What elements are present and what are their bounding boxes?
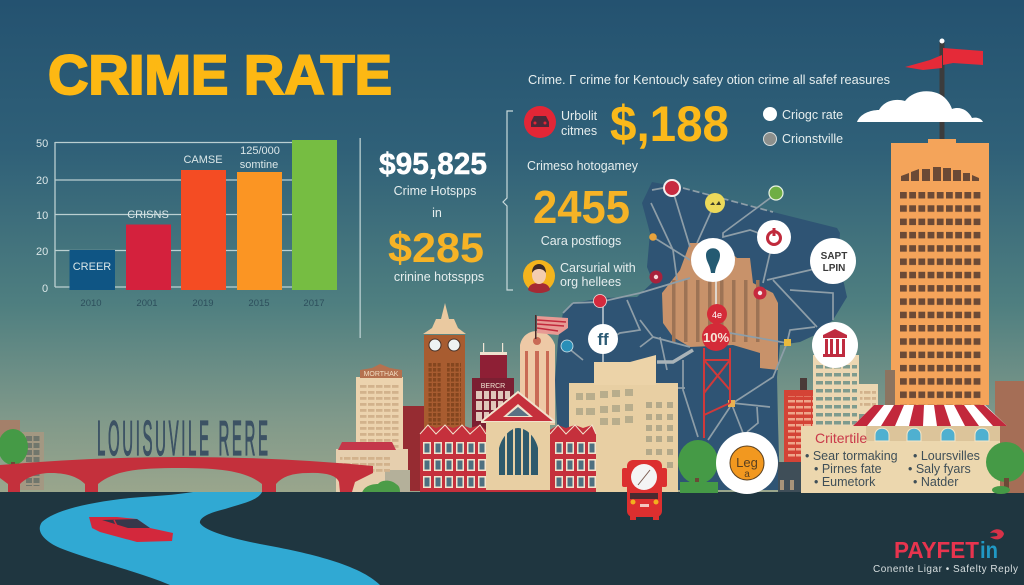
tree center — [678, 440, 718, 493]
river — [40, 492, 380, 585]
tree left — [0, 429, 28, 472]
info panel: • Sear tormaking — [805, 449, 898, 463]
x axis labels: 2015 — [248, 298, 270, 309]
dark red block — [403, 406, 427, 491]
info panel: • Pirnes fate — [814, 462, 882, 476]
building: red hall — [420, 392, 596, 493]
bar labels: CAMSE — [183, 154, 223, 166]
bar labels — [73, 145, 280, 273]
stats column: in — [432, 206, 442, 220]
bar labels: somtine — [240, 159, 278, 171]
icon: car — [524, 106, 556, 138]
car — [89, 517, 173, 542]
building: maroon — [472, 343, 514, 438]
y axis labels: 50 — [36, 138, 48, 150]
cloud — [857, 91, 983, 122]
x axis labels: 2017 — [303, 298, 325, 309]
info panel: • Natder — [913, 475, 958, 489]
info panel: • Loursvilles — [913, 449, 980, 463]
bar labels: 125/000 — [240, 145, 280, 157]
red tower: 4e — [712, 310, 722, 320]
legend: Criogc rate — [782, 108, 843, 122]
logo: in — [980, 537, 998, 563]
stats column: crinine hotsspps — [394, 270, 484, 284]
icon: person — [523, 260, 555, 293]
awning domes — [875, 428, 989, 441]
logo — [873, 529, 1018, 575]
big stat: $,188 — [610, 96, 729, 152]
stats column: Crime Hotspps — [394, 184, 476, 198]
info panel — [801, 405, 1007, 493]
building: domed tower — [520, 331, 555, 425]
bar labels: CREER — [73, 261, 111, 273]
y axis labels: 20 — [36, 246, 48, 258]
text node: SAPT — [821, 251, 847, 262]
info panel: • Eumetork — [814, 475, 876, 489]
tree right — [986, 442, 1024, 494]
x axis labels: 2001 — [136, 298, 158, 309]
person caption: org hellees — [560, 275, 621, 289]
node: f icon: ff — [597, 330, 609, 349]
node: orange badge: Leg — [736, 455, 758, 470]
y axis labels: 10 — [36, 210, 48, 222]
left small building — [0, 420, 44, 490]
stats column: $95,825 — [379, 146, 487, 181]
x axis labels — [80, 298, 325, 309]
right background building — [885, 370, 1024, 493]
bracket — [503, 111, 513, 290]
subtitle: Crime. Γ crime for Kentoucly safey otion crime all safef reasures — [528, 73, 890, 87]
x axis labels: 2019 — [192, 298, 214, 309]
bush — [362, 481, 400, 493]
legend: Crionstville — [782, 132, 843, 146]
y axis labels — [36, 138, 48, 295]
building: maroon: BERCR — [481, 383, 505, 390]
cream building — [813, 355, 878, 430]
x axis labels: 2010 — [80, 298, 102, 309]
node: orange badge — [716, 432, 778, 494]
node: orange badge: a — [744, 469, 750, 480]
info panel: Critertile — [815, 430, 867, 446]
urban crimes label — [561, 109, 598, 138]
y axis labels: 20 — [36, 175, 48, 187]
map central building — [662, 243, 778, 370]
building: large beige — [569, 355, 678, 493]
bars — [70, 140, 337, 290]
bus — [622, 460, 667, 520]
legend — [763, 107, 843, 146]
icon: bulb node — [691, 238, 735, 282]
red building — [778, 378, 814, 492]
caption: Cara postfiogs — [541, 234, 621, 248]
person caption: Carsurial with — [560, 261, 636, 275]
red tower: 10% — [703, 330, 729, 345]
building: tan tower: MORTHAK — [364, 371, 399, 378]
orange tower — [891, 38, 989, 405]
node: temple icon — [812, 322, 858, 368]
map pins — [561, 180, 791, 407]
bar labels: CRISNS — [127, 209, 169, 221]
ground — [0, 492, 1024, 585]
info panel: • Saly fyars — [908, 462, 971, 476]
divider line — [360, 138, 361, 338]
stats column — [379, 146, 487, 284]
title: CRIME RATE — [48, 43, 392, 106]
red tower — [702, 304, 730, 438]
stats column: $285 — [388, 224, 484, 271]
flag on map — [535, 315, 568, 339]
urban crimes label: Urbolit — [561, 109, 598, 123]
bar chart — [36, 138, 337, 309]
building: clock tower — [423, 303, 466, 435]
hotspot label: Crimeso hotogamey — [527, 159, 639, 173]
y axis labels: 0 — [42, 283, 48, 295]
logo: Conente Ligar • Safelty Reply — [873, 564, 1018, 575]
map — [555, 180, 847, 490]
stat 2455: 2455 — [533, 181, 630, 233]
icon: power node — [757, 220, 791, 254]
person caption — [560, 261, 636, 289]
urban crimes label: citmes — [561, 124, 597, 138]
bridge — [0, 457, 373, 492]
awning — [853, 405, 1007, 426]
building: small awning — [336, 442, 410, 493]
text node — [810, 238, 856, 284]
text node: LPIN — [823, 263, 845, 274]
map roads — [563, 185, 833, 440]
node: f icon — [588, 324, 618, 354]
label: Louisville: LOUISUVILE RERE — [97, 410, 268, 466]
building: tan tower — [356, 364, 403, 491]
logo: PAYFET — [894, 537, 979, 563]
